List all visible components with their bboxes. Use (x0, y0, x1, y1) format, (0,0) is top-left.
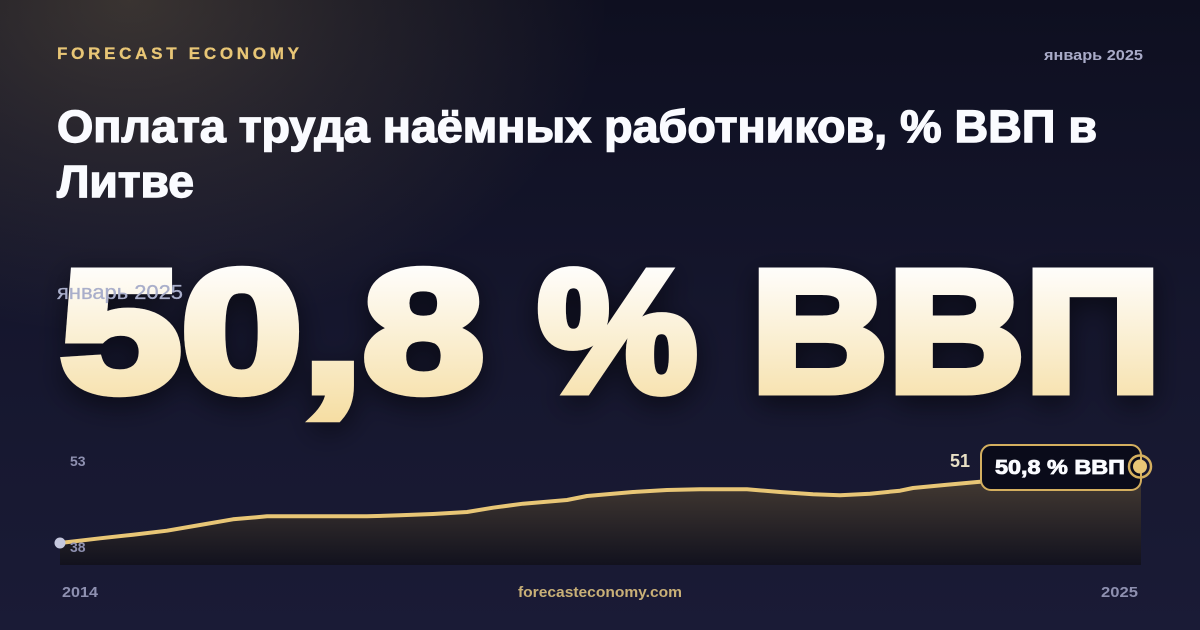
date overlay label: январь 2025 (57, 282, 183, 304)
brand label: FORECAST ECONOMY (57, 44, 300, 63)
start year: 2014 (62, 584, 99, 601)
chart line (60, 467, 1141, 543)
big value: 50,8 (60, 234, 484, 428)
big value: ВВП (751, 234, 1161, 428)
title: Оплата труда наёмных работников, % ВВП в (57, 101, 1097, 152)
big value: % (538, 234, 697, 428)
chart area fill (60, 467, 1141, 565)
start point (54, 538, 66, 548)
end point marker (1129, 456, 1151, 478)
last value label: 51 (950, 451, 970, 471)
title: Литве (57, 156, 194, 207)
title (57, 101, 1097, 207)
date top right: январь 2025 (1044, 47, 1143, 64)
end year: 2025 (1101, 584, 1138, 601)
value badge (981, 445, 1141, 490)
axis min label: 38 (70, 539, 86, 555)
source url: forecasteconomy.com (518, 584, 682, 601)
line chart (54, 467, 1141, 565)
big value (60, 234, 1161, 428)
axis max label: 53 (70, 453, 86, 469)
value badge: 50,8 % ВВП (995, 457, 1125, 479)
